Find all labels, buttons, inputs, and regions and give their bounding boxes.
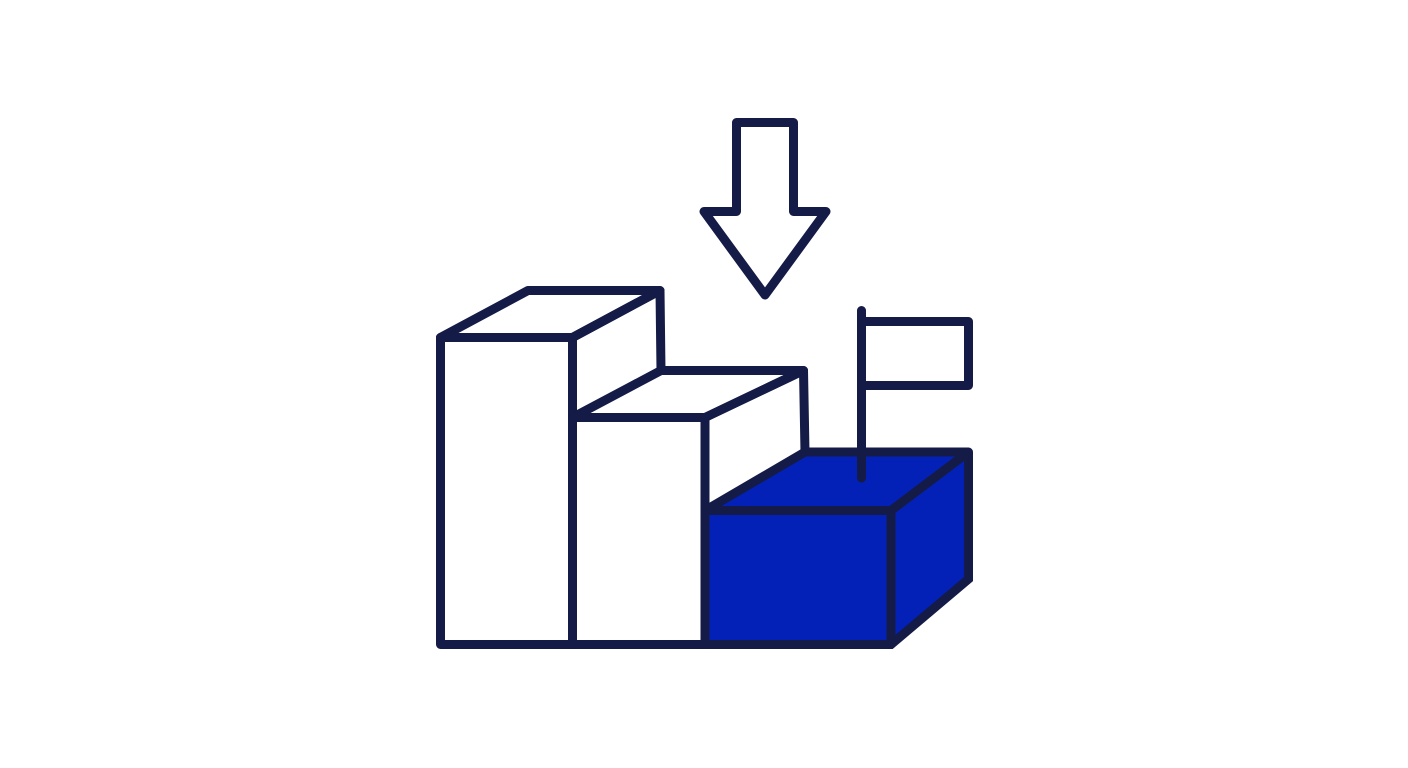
flag: on blue box <box>862 310 968 478</box>
block: tall left column <box>440 290 661 644</box>
block: middle column <box>572 370 805 644</box>
block: blue short box <box>705 452 968 644</box>
arrow: pointing down <box>704 122 826 295</box>
